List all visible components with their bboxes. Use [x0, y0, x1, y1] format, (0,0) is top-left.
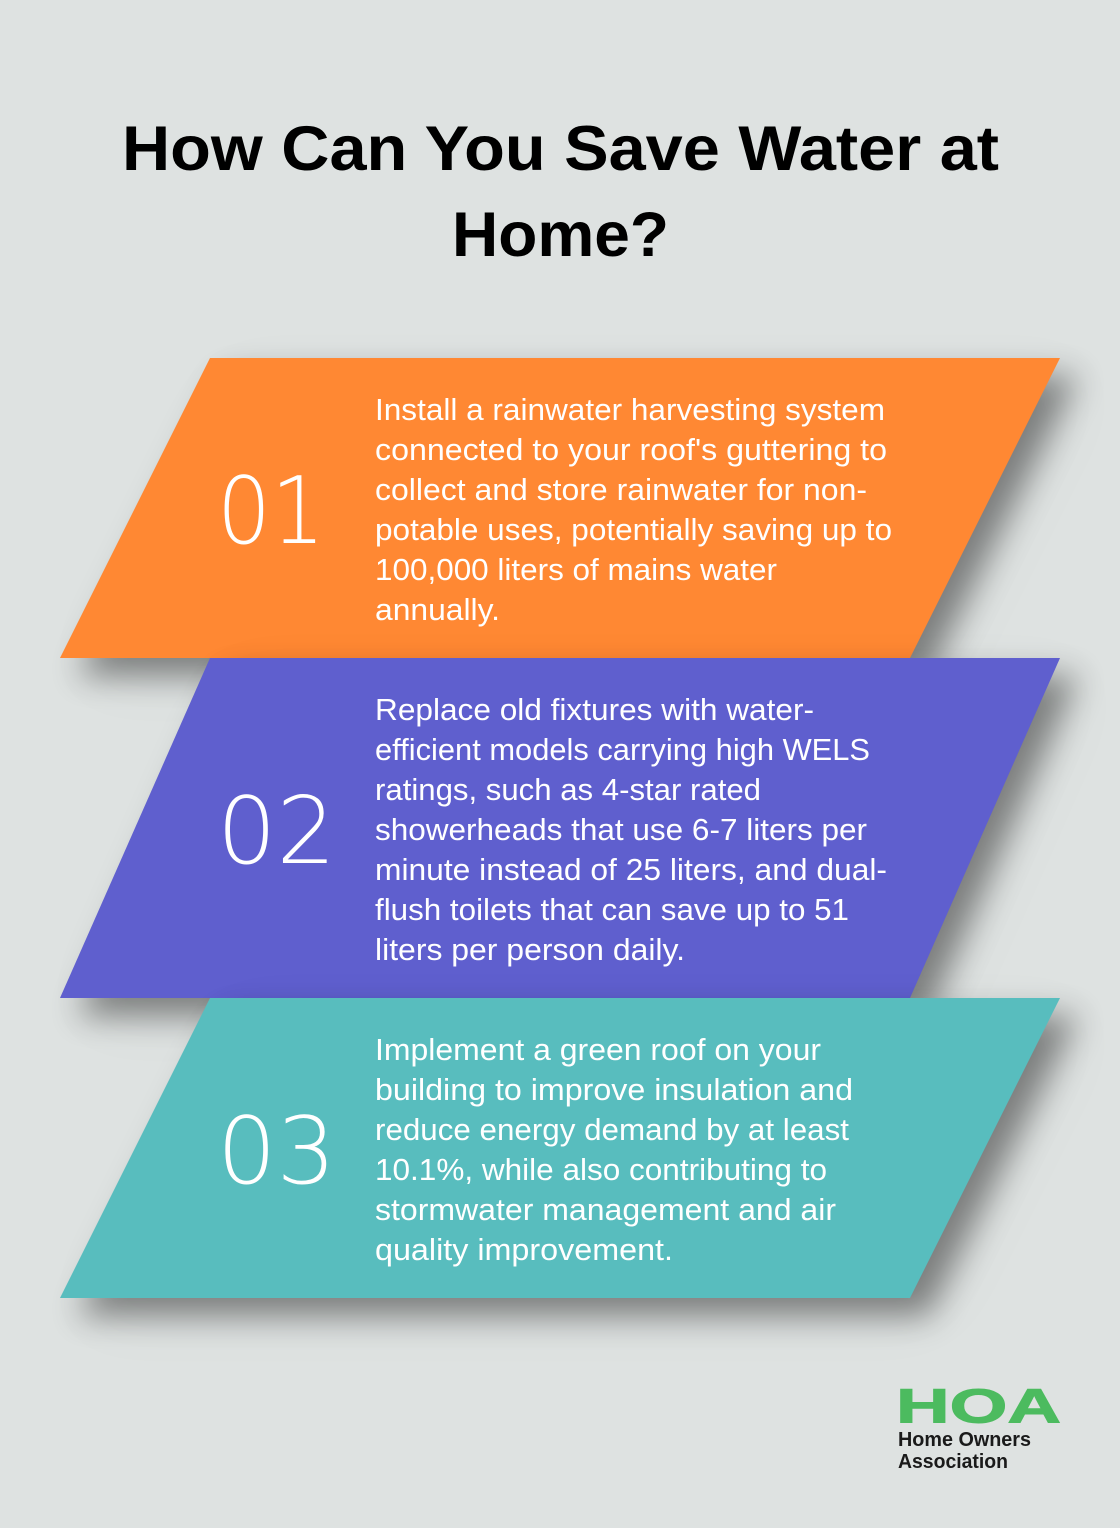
- title: [122, 114, 999, 270]
- step 1 text: potable uses, potentially saving up to: [375, 513, 892, 547]
- step 2 text: flush toilets that can save up to 51: [375, 893, 849, 927]
- step 1 text: annually.: [375, 593, 500, 627]
- step 1 number: 01: [217, 457, 325, 565]
- step 2 text: ratings, such as 4-star rated: [375, 773, 761, 807]
- logo: HOA Home Owners Association: HOA: [896, 1380, 1061, 1434]
- step 3 text: [375, 1033, 853, 1267]
- panel: step 1: [60, 358, 1082, 678]
- step 3 text: building to improve insulation and: [375, 1073, 853, 1107]
- title: Home?: [452, 200, 669, 270]
- logo: HOA Home Owners Association: Association: [898, 1451, 1008, 1473]
- step 3 text: Implement a green roof on your: [375, 1033, 821, 1067]
- step 3 text: quality improvement.: [375, 1233, 673, 1267]
- step 3 text: 10.1%, while also contributing to: [375, 1153, 827, 1187]
- step 1 text: 100,000 liters of mains water: [375, 553, 777, 587]
- panel: step 2: [60, 658, 1082, 1018]
- step 3 text: reduce energy demand by at least: [375, 1113, 849, 1147]
- title: How Can You Save Water at: [122, 114, 999, 184]
- step 2 text: minute instead of 25 liters, and dual-: [375, 853, 887, 887]
- step 3 number: 03: [217, 1097, 336, 1205]
- step 3 teal parallelogram: [60, 998, 1060, 1298]
- step 1 orange parallelogram: [60, 358, 1060, 658]
- step 1 text: Install a rainwater harvesting system: [375, 393, 885, 427]
- panel: step 3: [60, 998, 1082, 1318]
- step 2 text: [375, 693, 887, 967]
- step 2 text: liters per person daily.: [375, 933, 685, 967]
- step 1 text: connected to your roof's guttering to: [375, 433, 887, 467]
- step 2 purple parallelogram: [60, 658, 1060, 998]
- step 2 number: 02: [217, 777, 336, 885]
- logo: HOA Home Owners Association: [896, 1380, 1061, 1473]
- step 3 text: stormwater management and air: [375, 1193, 836, 1227]
- step 1 text: [375, 393, 892, 627]
- step 2 text: efficient models carrying high WELS: [375, 733, 870, 767]
- step 2 text: Replace old fixtures with water-: [375, 693, 814, 727]
- step 2 text: showerheads that use 6-7 liters per: [375, 813, 867, 847]
- step 1 text: collect and store rainwater for non-: [375, 473, 867, 507]
- logo: HOA Home Owners Association: Home Owners: [898, 1429, 1031, 1451]
